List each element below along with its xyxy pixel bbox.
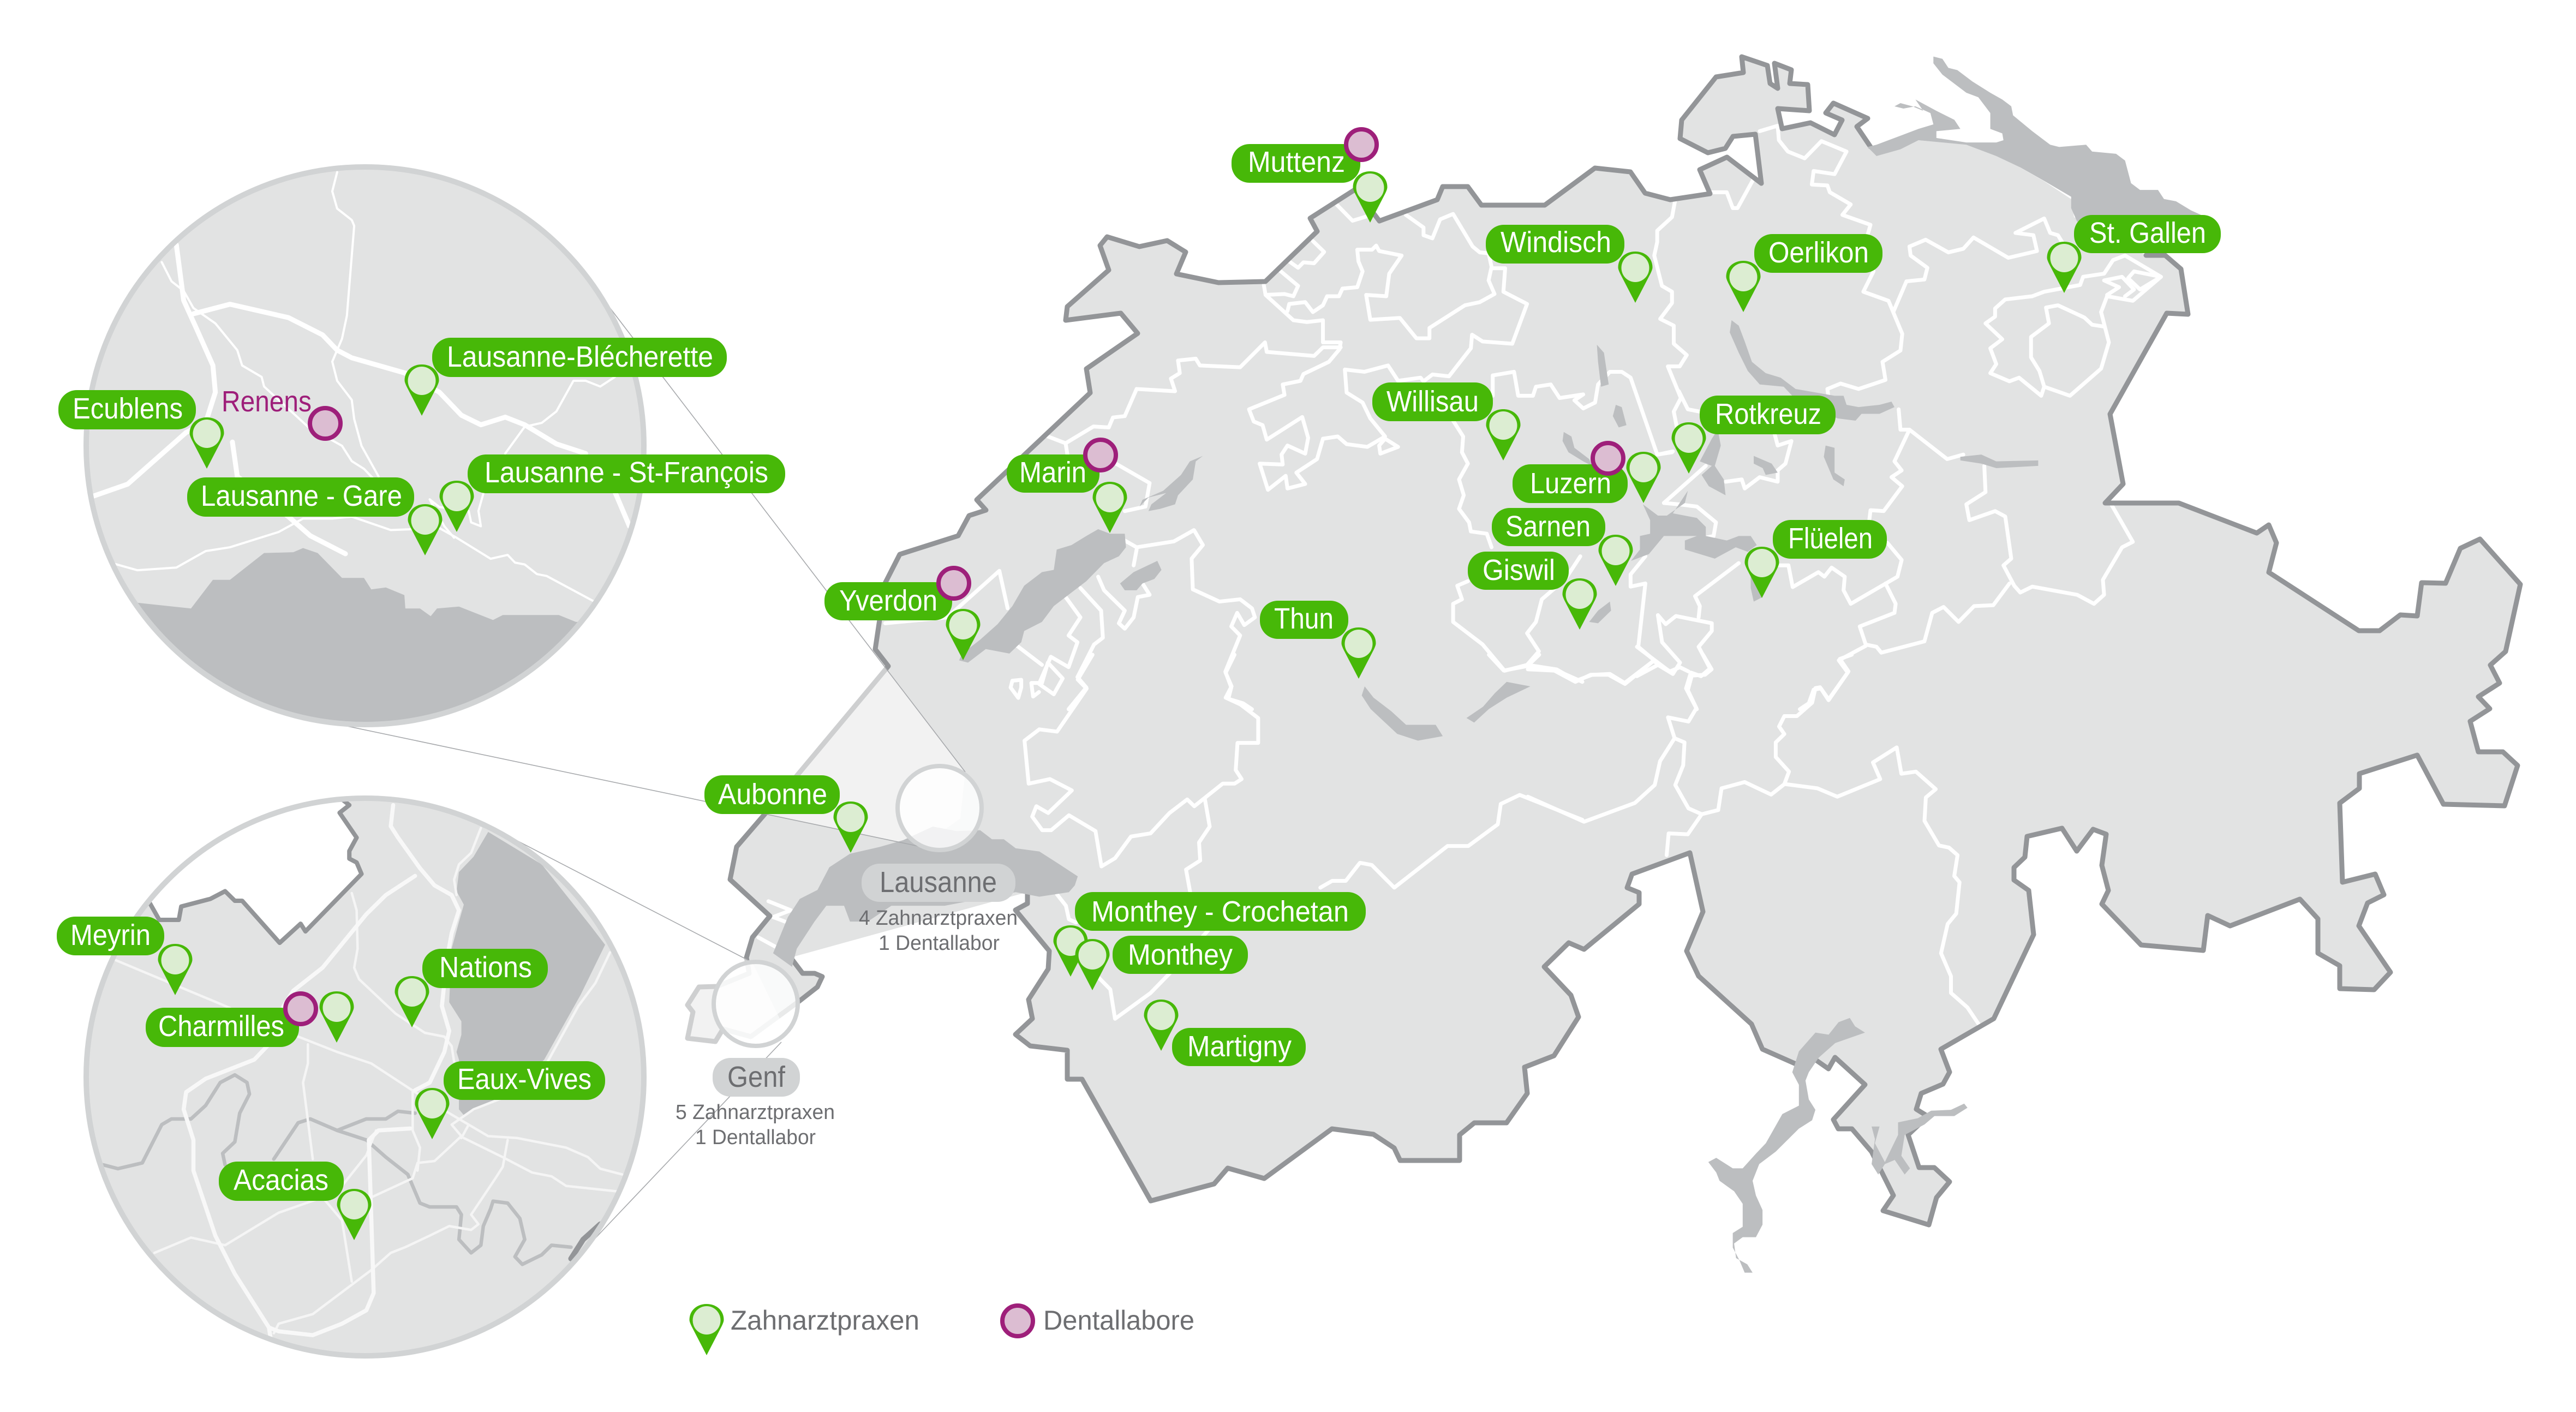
location: Windisch: Windisch [1501,226,1611,259]
location: Willisau [1372,382,1520,460]
panel: Genf detail map [79,780,644,1356]
canton borders south-west [758,655,1582,1019]
circle rim [86,167,644,725]
location: Monthey - Crochetan [1053,892,1366,977]
location: Muttenz: Muttenz [1248,146,1345,178]
location: Muttenz [1232,129,1387,223]
label: Lausanne summary [859,864,1018,955]
panel: Lausanne detail map [84,167,664,759]
national border east and south [1015,255,2520,1225]
circle rim [86,798,644,1356]
location: Lausanne - Gare [187,477,442,555]
label: Genf summary: Genf [727,1061,786,1093]
lakes north-west [959,345,1627,662]
location: Oerlikon: Oerlikon [1768,236,1869,269]
location: Sarnen: Sarnen [1505,510,1591,543]
location: Charmilles: Charmilles [158,1010,284,1043]
location: Giswil: Giswil [1483,554,1555,587]
location: Marin [1007,440,1127,533]
label: Lausanne summary: 4 Zahnarztpraxen [859,907,1018,930]
location: Lausanne - St-François [440,454,785,532]
location: Windisch [1486,225,1652,303]
label: Genf summary [676,1058,835,1149]
location: St. Gallen: St. Gallen [2089,217,2206,249]
zoom beam: Genf [515,840,788,1243]
location: Nations: Nations [439,951,532,984]
location: St. Gallen [2047,215,2221,293]
location: Giswil [1468,552,1597,630]
location: Eaux-Vives: Eaux-Vives [457,1063,591,1096]
location: Meyrin [57,917,192,995]
location: Meyrin: Meyrin [70,919,151,952]
location: Aubonne [704,775,868,853]
circle base [86,167,644,725]
zoom beam: Lausanne [342,304,965,847]
location: Oerlikon [1726,234,1882,312]
location: Thun: Thun [1274,602,1334,635]
location: Ecublens: Ecublens [73,392,183,425]
label: Lausanne summary: 1 Dentallabor [878,932,1000,955]
lens: Lausanne [898,766,982,850]
label: Genf summary: 1 Dentallabor [695,1126,816,1149]
location: Eaux-Vives [415,1061,605,1139]
map: Switzerland [342,57,2520,1273]
label: Lausanne summary: Lausanne [880,866,997,899]
canton borders north-east [1637,125,2161,709]
connector line Genf lower [590,1042,781,1243]
location: Flüelen [1745,520,1887,598]
circle base [86,798,644,1356]
location: Thun [1260,601,1376,679]
location: Monthey - Crochetan: Monthey - Crochetan [1091,895,1349,928]
location: Flüelen: Flüelen [1788,522,1873,555]
location: Monthey: Monthey [1128,938,1233,971]
location: Martigny [1144,1000,1306,1066]
legend: Zahnarztpraxen: Zahnarztpraxen [731,1305,919,1336]
lens: Genf [714,962,798,1046]
legend: Zahnarztpraxen [690,1304,919,1355]
Lausanne roads and lake [93,171,631,722]
label: Genf summary: 5 Zahnarztpraxen [676,1101,835,1124]
location: Renens: Renens [222,385,312,418]
location: Acacias: Acacias [234,1164,328,1196]
location: Charmilles [146,991,354,1047]
national border west and north [688,57,1870,1042]
location: Monthey [1075,936,1248,990]
location: Luzern: Luzern [1530,467,1611,500]
location: Sarnen [1492,508,1633,586]
location: Acacias [219,1162,371,1240]
lakes north-east [1631,57,2206,602]
location: Luzern [1513,443,1661,503]
location: Lausanne - Gare: Lausanne - Gare [201,480,402,512]
location: Marin: Marin [1019,456,1086,489]
location: Rotkreuz: Rotkreuz [1715,398,1821,430]
location: Martigny: Martigny [1187,1030,1292,1063]
canton borders south-east [1528,655,1979,1024]
Genf roads, rivers and lake [79,780,622,1343]
location: Renens [222,385,340,439]
location: Ecublens [58,390,224,469]
lakes Thun, Brienz and Geneva [773,682,1531,967]
location: Lausanne-Blécherette [405,338,727,416]
location: Rotkreuz [1672,396,1836,474]
location: Nations [395,949,548,1027]
connector line Genf upper [515,840,752,962]
location: Lausanne-Blécherette: Lausanne-Blécherette [447,340,713,373]
location: Yverdon [824,568,980,660]
lakes Ticino [1708,1018,1968,1273]
location: Willisau: Willisau [1386,385,1479,418]
connector line Lausanne lower [342,725,921,847]
legend: Dentallabore: Dentallabore [1043,1305,1194,1336]
location: Lausanne - St-François: Lausanne - St-François [485,456,768,489]
location: Yverdon: Yverdon [839,584,937,617]
canton borders north-west [885,201,1687,709]
country fill [688,57,2520,1225]
connector line Lausanne upper [607,304,965,772]
location: Aubonne: Aubonne [718,778,827,811]
